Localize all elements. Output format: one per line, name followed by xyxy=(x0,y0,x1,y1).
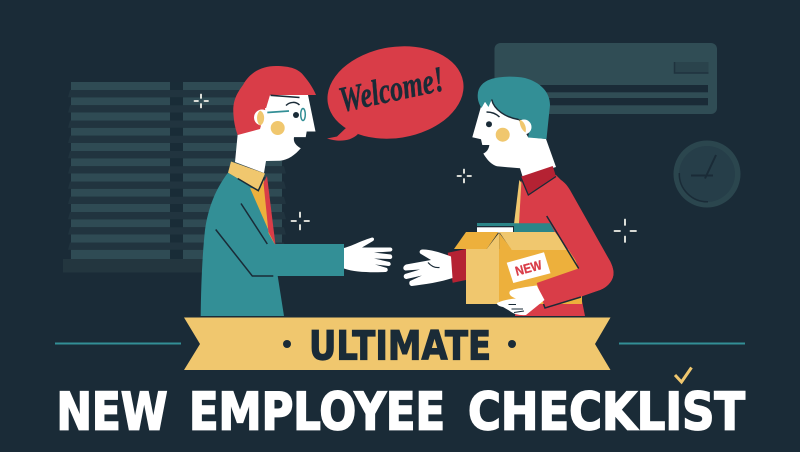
arm lines xyxy=(544,216,581,308)
glasses xyxy=(267,111,289,112)
eye and brow xyxy=(486,121,492,127)
man on the right with box xyxy=(403,77,614,316)
new label xyxy=(507,252,550,283)
collar xyxy=(521,166,556,195)
reaching hand xyxy=(403,249,452,286)
face and neck xyxy=(472,100,556,177)
ear xyxy=(516,120,532,134)
welcome text: Welcome! xyxy=(335,59,447,120)
shirt and tie xyxy=(250,179,275,245)
cheek xyxy=(496,128,510,142)
neck and face xyxy=(235,95,316,173)
collar xyxy=(228,162,265,191)
handshake hand xyxy=(344,238,392,272)
air conditioner xyxy=(494,43,717,114)
wall clock xyxy=(674,140,740,208)
sparkles xyxy=(194,94,636,242)
main title: NEW xyxy=(56,382,168,442)
divider line left xyxy=(55,342,181,344)
ribbon banner xyxy=(184,318,610,370)
shirt strip xyxy=(514,180,522,224)
holding hand xyxy=(497,286,544,315)
jacket lines xyxy=(216,177,273,276)
teal hair xyxy=(478,77,550,139)
speech bubble xyxy=(321,37,470,148)
new label: NEW xyxy=(514,257,544,279)
sleeve xyxy=(448,249,466,283)
ear xyxy=(254,110,270,126)
mouth xyxy=(294,137,306,148)
teal jacket xyxy=(201,173,344,316)
forearm xyxy=(537,230,614,308)
window blinds xyxy=(63,82,288,272)
mouth xyxy=(482,145,489,154)
cheek xyxy=(271,121,285,135)
main title: CHECKLIST xyxy=(468,382,745,442)
eye and eyebrow xyxy=(293,112,299,118)
banner text: ULTIMATE xyxy=(309,324,491,370)
divider line right xyxy=(619,342,745,344)
banner dots xyxy=(283,340,516,348)
check mark xyxy=(675,368,692,382)
main title xyxy=(56,382,745,442)
main title: EMPLOYEE xyxy=(189,382,445,442)
red shirt body xyxy=(515,175,614,316)
red hair xyxy=(233,66,316,135)
cardboard box xyxy=(454,232,582,304)
man on the left greeting xyxy=(201,66,392,316)
box contents xyxy=(477,223,555,233)
